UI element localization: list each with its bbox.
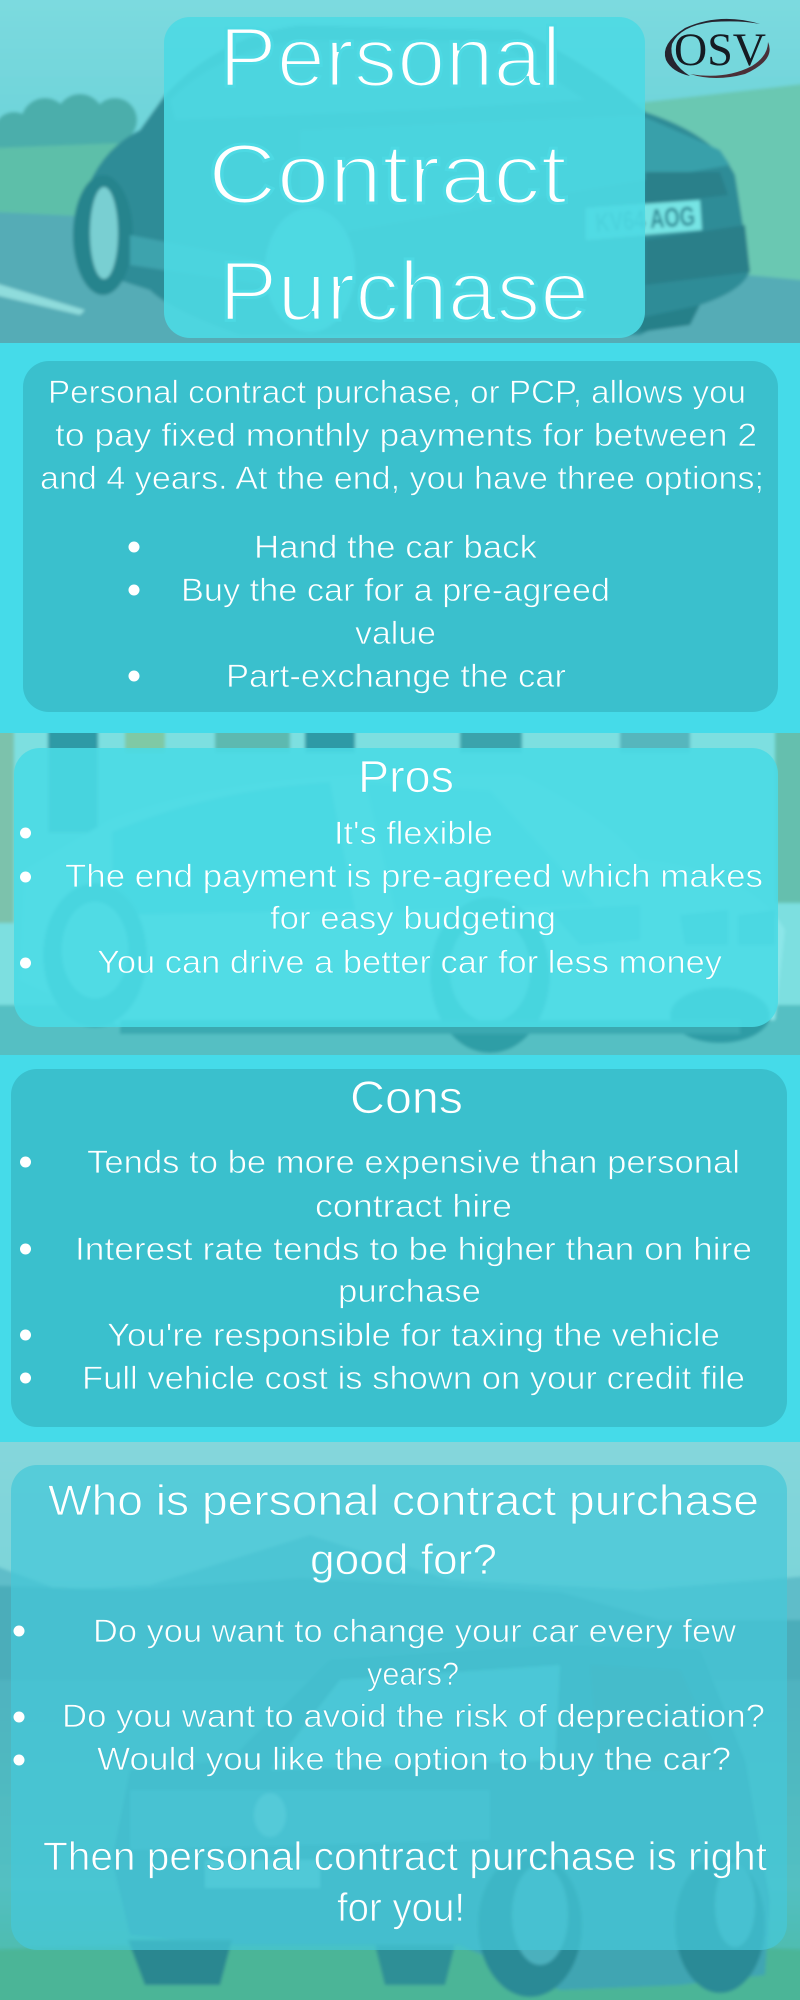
panel: intro — [23, 361, 778, 712]
bullets — [20, 1156, 31, 1384]
bullets — [20, 828, 31, 968]
heading: pros: Pros — [358, 751, 454, 802]
intro text: Buy the car for a pre-agreed — [181, 572, 610, 608]
panel: pros — [14, 748, 778, 1027]
pros photo: white car — [0, 733, 800, 1055]
title panel — [164, 17, 645, 338]
pros list: for easy budgeting — [270, 900, 556, 936]
cons list — [75, 1144, 752, 1396]
heading: who: Who is personal contract purchase — [48, 1477, 759, 1525]
intro text: to pay fixed monthly payments for between 2 — [55, 417, 757, 453]
bullets — [14, 1626, 24, 1766]
header photo: car on road — [0, 0, 800, 363]
bullets — [128, 542, 140, 682]
intro text: Part-exchange the car — [226, 658, 566, 694]
cons list: purchase — [338, 1273, 481, 1309]
who photo: SUV in landscape — [0, 1422, 800, 2000]
intro text: Hand the car back — [254, 529, 538, 565]
intro text — [40, 374, 764, 694]
cons list: contract hire — [315, 1188, 512, 1224]
who list — [62, 1613, 765, 1777]
pros list: The end payment is pre-agreed which makes — [65, 858, 763, 894]
title: Purchase — [219, 244, 589, 338]
pros list: It's flexible — [334, 815, 493, 851]
pros list — [65, 815, 763, 980]
intro text: and 4 years. At the end, you have three options; — [40, 460, 764, 496]
heading: who: good for? — [310, 1536, 497, 1584]
panel: cons — [11, 1069, 787, 1427]
closing statement: Then personal contract purchase is right — [43, 1835, 767, 1879]
closing statement — [43, 1835, 767, 1930]
cons list: Full vehicle cost is shown on your credit file — [82, 1360, 745, 1396]
intro text: Personal contract purchase, or PCP, allows you — [48, 374, 746, 410]
title: Personal — [219, 10, 561, 104]
intro text: value — [355, 615, 436, 651]
heading: who — [48, 1477, 759, 1584]
pros list: You can drive a better car for less money — [97, 944, 722, 980]
icon: OSV logo: OSV — [674, 24, 766, 76]
who list: years? — [367, 1656, 459, 1692]
title — [208, 10, 589, 338]
header photo: car on road: KV64 AOG — [594, 201, 696, 238]
title: Contract — [208, 127, 567, 221]
who list: Do you want to avoid the risk of depreciation? — [62, 1698, 765, 1734]
cons list: Tends to be more expensive than personal — [87, 1144, 740, 1180]
cons list: You're responsible for taxing the vehicle — [107, 1317, 720, 1353]
closing statement: for you! — [337, 1886, 465, 1930]
who list: Do you want to change your car every few — [93, 1613, 737, 1649]
heading: cons: Cons — [350, 1072, 463, 1123]
panel: who is it good for — [11, 1465, 787, 1950]
who list: Would you like the option to buy the car? — [97, 1741, 731, 1777]
cons list: Interest rate tends to be higher than on hire — [75, 1231, 752, 1267]
